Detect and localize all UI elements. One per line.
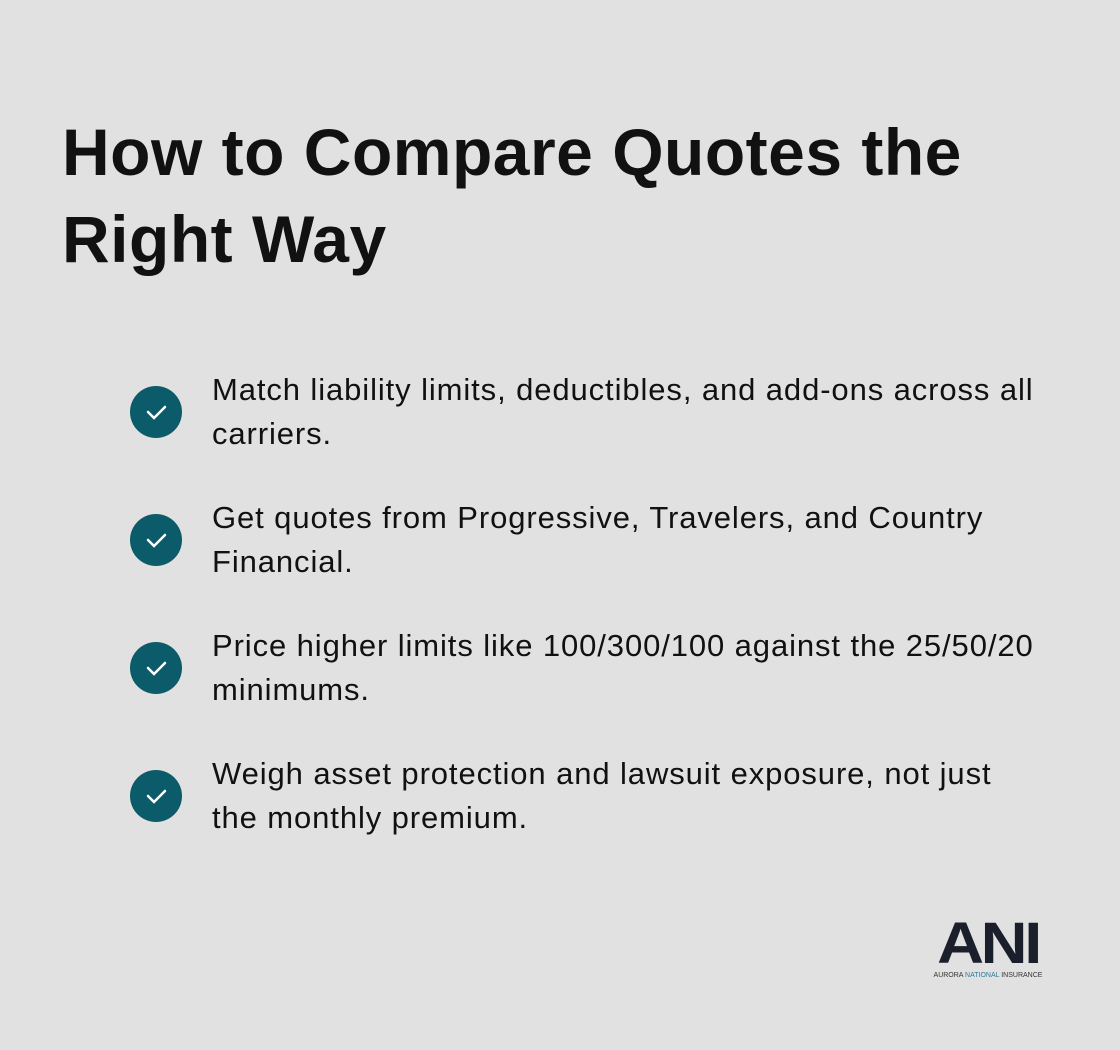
title [62, 115, 962, 276]
text: Get quotes from Progressive, Travelers, and Country [212, 500, 983, 535]
item 2 [130, 500, 983, 579]
logo: ANI [937, 911, 1039, 976]
title: Right Way [62, 202, 387, 276]
text [212, 628, 1034, 707]
text [212, 500, 983, 579]
text: Price higher limits like 100/300/100 against the 25/50/20 [212, 628, 1034, 663]
icon: check [130, 514, 182, 566]
item 4 [130, 756, 991, 835]
item 1 [130, 372, 1034, 451]
text: carriers. [212, 416, 332, 451]
logo: AURORA NATIONAL INSURANCE [934, 972, 1042, 979]
icon: check [130, 386, 182, 438]
text [212, 372, 1034, 451]
text: Weigh asset protection and lawsuit exposure, not just [212, 756, 991, 791]
icon: check [130, 770, 182, 822]
item 3 [130, 628, 1034, 707]
icon: check [130, 642, 182, 694]
text: Financial. [212, 544, 354, 579]
title: How to Compare Quotes the [62, 115, 962, 189]
text [212, 756, 991, 835]
text: Match liability limits, deductibles, and add-ons across all [212, 372, 1034, 407]
text: the monthly premium. [212, 800, 528, 835]
text: minimums. [212, 672, 370, 707]
